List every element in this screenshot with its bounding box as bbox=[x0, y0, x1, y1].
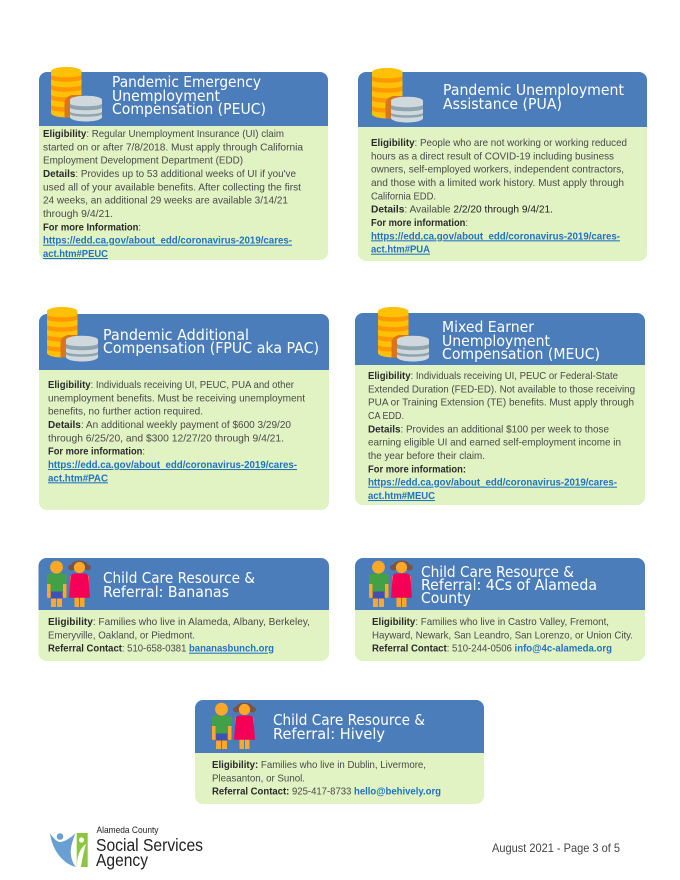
text: PAC details: through 6/25/20, and $300 12/27/20 through 9/4/21. bbox=[48, 433, 284, 444]
heading: FPUC aka PAC: Compensation (FPUC aka PAC) bbox=[103, 339, 319, 357]
text: MEUC details: Extended Duration (FED-ED). Not available to those receiving bbox=[368, 384, 635, 395]
text: MEUC details: Eligibility: Individuals receiving UI, PEUC or Federal-State bbox=[368, 371, 618, 382]
text: PEUC details bbox=[43, 129, 303, 260]
heading: PUA: Assistance (PUA) bbox=[443, 95, 562, 113]
heading: PEUC: Compensation (PEUC) bbox=[112, 100, 266, 118]
text: MEUC details: CA EDD. bbox=[368, 411, 404, 422]
heading: 4Cs bbox=[421, 563, 597, 607]
text: MEUC details: https://edd.ca.gov/about_edd/coronavirus-2019/cares- bbox=[368, 478, 617, 489]
text: PEUC details: Eligibility: Regular Unemployment Insurance (UI) claim bbox=[43, 129, 284, 140]
text: PUA details: and those with a limited work history. Must apply through bbox=[371, 178, 624, 189]
text: PUA details: https://edd.ca.gov/about_edd/coronavirus-2019/cares- bbox=[371, 231, 620, 242]
text: Hively details bbox=[212, 760, 441, 798]
icon: coin stacks bbox=[51, 67, 102, 122]
text: PUA details: Eligibility: People who are not working or working reduced bbox=[371, 138, 627, 149]
icon: boy and girl bbox=[47, 560, 91, 607]
text: logo wordmark: Agency bbox=[96, 850, 148, 870]
panel: Pandemic Additional Compensation bbox=[39, 307, 329, 510]
heading: PEUC: Pandemic Emergency bbox=[112, 73, 261, 91]
text: PUA details: hours as a direct result of COVID-19 including business bbox=[371, 151, 614, 162]
text: PEUC details: 24 weeks, an additional 29 weeks are available 3/14/21 bbox=[43, 196, 288, 207]
text: MEUC details: act.htm#MEUC bbox=[368, 491, 435, 502]
panel: Pandemic Emergency Unemployment Compensation bbox=[39, 67, 328, 260]
icon: coin stacks bbox=[378, 307, 429, 362]
text: logo wordmark: Social Services bbox=[96, 835, 203, 855]
text: logo wordmark: Alameda County bbox=[96, 825, 159, 836]
text: PEUC details: started on or after 7/8/2018. Must apply through California bbox=[43, 142, 303, 153]
text: PEUC details: For more Information: bbox=[43, 222, 141, 233]
heading: FPUC aka PAC: Pandemic Additional bbox=[103, 326, 249, 344]
icon: coin stacks bbox=[47, 307, 98, 362]
panel: Child Care Bananas bbox=[38, 558, 329, 661]
text: PAC details: https://edd.ca.gov/about_edd/coronavirus-2019/cares- bbox=[48, 460, 297, 471]
text: Bananas details bbox=[48, 617, 310, 655]
text: MEUC details bbox=[368, 371, 635, 502]
text: PEUC details: Details: Provides up to 53 additional weeks of UI if you've bbox=[43, 169, 296, 180]
heading: MEUC bbox=[442, 318, 600, 363]
heading: PEUC bbox=[112, 73, 266, 118]
text: PAC details: act.htm#PAC bbox=[48, 473, 108, 484]
text: PAC details: Details: An additional weekly payment of $600 3/29/20 bbox=[48, 420, 291, 431]
text: PUA details: For more information: bbox=[371, 218, 468, 229]
heading: Bananas: Referral: Bananas bbox=[103, 583, 229, 601]
text: logo wordmark bbox=[96, 825, 203, 870]
icon: boy and girl bbox=[212, 702, 256, 749]
text: 4Cs details: Eligibility: Families who live in Castro Valley, Fremont, bbox=[372, 617, 609, 628]
heading: Hively: Referral: Hively bbox=[273, 725, 385, 743]
text: PUA details: owners, self-employed workers, independent contractors, bbox=[371, 165, 624, 176]
text: Bananas details: Emeryville, Oakland, or Piedmont. bbox=[48, 630, 195, 641]
text: PEUC details: act.htm#PEUC bbox=[43, 249, 108, 260]
text: PUA details bbox=[371, 138, 627, 256]
heading: Hively bbox=[273, 711, 425, 743]
text: PAC details: Eligibility: Individuals receiving UI, PEUC, PUA and other bbox=[48, 380, 294, 391]
text: MEUC details: Details: Provides an additional $100 per week to those bbox=[368, 424, 609, 435]
text: PEUC details: Employment Development Department (EDD) bbox=[43, 156, 243, 167]
text: PAC details: unemployment benefits. Must be receiving unemployment bbox=[48, 393, 305, 404]
heading: MEUC: Compensation (MEUC) bbox=[442, 345, 600, 363]
icon: coin stacks bbox=[372, 68, 423, 122]
heading: Bananas bbox=[103, 569, 255, 601]
text: MEUC details: earning eligible UI and earned self-employment income in bbox=[368, 438, 621, 449]
heading: Bananas: Child Care Resource & bbox=[103, 569, 255, 587]
text: 4Cs details: Referral Contact: 510-244-0506 info@4c-alameda.org bbox=[372, 644, 612, 655]
text: PEUC details: used all of your available benefits. After collecting the first bbox=[43, 182, 301, 193]
logo: Alameda County Social Services Agency bbox=[50, 825, 203, 870]
panel: Child Care 4Cs of Alameda County bbox=[355, 558, 645, 661]
text: MEUC details: the year before their claim. bbox=[368, 451, 485, 462]
heading: FPUC aka PAC bbox=[103, 326, 319, 357]
text: PAC details bbox=[48, 380, 305, 484]
text: PUA details: California EDD. bbox=[371, 191, 436, 202]
text: Hively details: Pleasanton, or Sunol. bbox=[212, 773, 305, 784]
text: Bananas details: Referral Contact: 510-658-0381 bananasbunch.org bbox=[48, 644, 274, 655]
text: MEUC details: PUA or Training Extension (TE) benefits. Must apply through bbox=[368, 398, 634, 409]
panel: Pandemic Unemployment Assistance bbox=[358, 68, 647, 261]
heading: PUA: Pandemic Unemployment bbox=[443, 81, 624, 99]
text: PEUC details: through 9/4/21. bbox=[43, 209, 113, 220]
heading: PEUC: Unemployment bbox=[112, 87, 220, 105]
text: Hively details: Eligibility: Families who live in Dublin, Livermore, bbox=[212, 760, 426, 771]
heading: Hively: Child Care Resource & bbox=[273, 711, 425, 729]
text: PUA details: Details: Available 2/2/20 through 9/4/21. bbox=[371, 205, 553, 216]
icon: agency mark bbox=[50, 833, 88, 867]
text: PEUC details: https://edd.ca.gov/about_edd/coronavirus-2019/cares- bbox=[43, 236, 292, 247]
text: page footer: August 2021 - Page 3 of 5 bbox=[492, 841, 620, 855]
heading: PUA bbox=[443, 81, 624, 113]
icon: boy and girl bbox=[369, 560, 413, 607]
text: PUA details: act.htm#PUA bbox=[371, 245, 430, 256]
heading: MEUC: Mixed Earner bbox=[442, 318, 535, 336]
heading: 4Cs: Referral: 4Cs of Alameda bbox=[421, 576, 597, 594]
heading: 4Cs: Child Care Resource & bbox=[421, 563, 574, 581]
text: 4Cs details: Hayward, Newark, San Leandro, San Lorenzo, or Union City. bbox=[372, 630, 633, 641]
text: Bananas details: Eligibility: Families who live in Alameda, Albany, Berkeley, bbox=[48, 617, 310, 628]
text: 4Cs details bbox=[372, 617, 633, 655]
text: PAC details: benefits, no further action required. bbox=[48, 407, 203, 418]
text: PAC details: For more information: bbox=[48, 447, 145, 458]
panel: Child Care Hively bbox=[195, 700, 484, 804]
heading: MEUC: Unemployment bbox=[442, 332, 550, 350]
heading: 4Cs: County bbox=[421, 589, 471, 607]
panel: Mixed Earner Unemployment Compensation bbox=[355, 307, 645, 505]
text: Hively details: Referral Contact: 925-417-8733 hello@behively.org bbox=[212, 787, 441, 798]
text: MEUC details: For more information: bbox=[368, 464, 466, 475]
